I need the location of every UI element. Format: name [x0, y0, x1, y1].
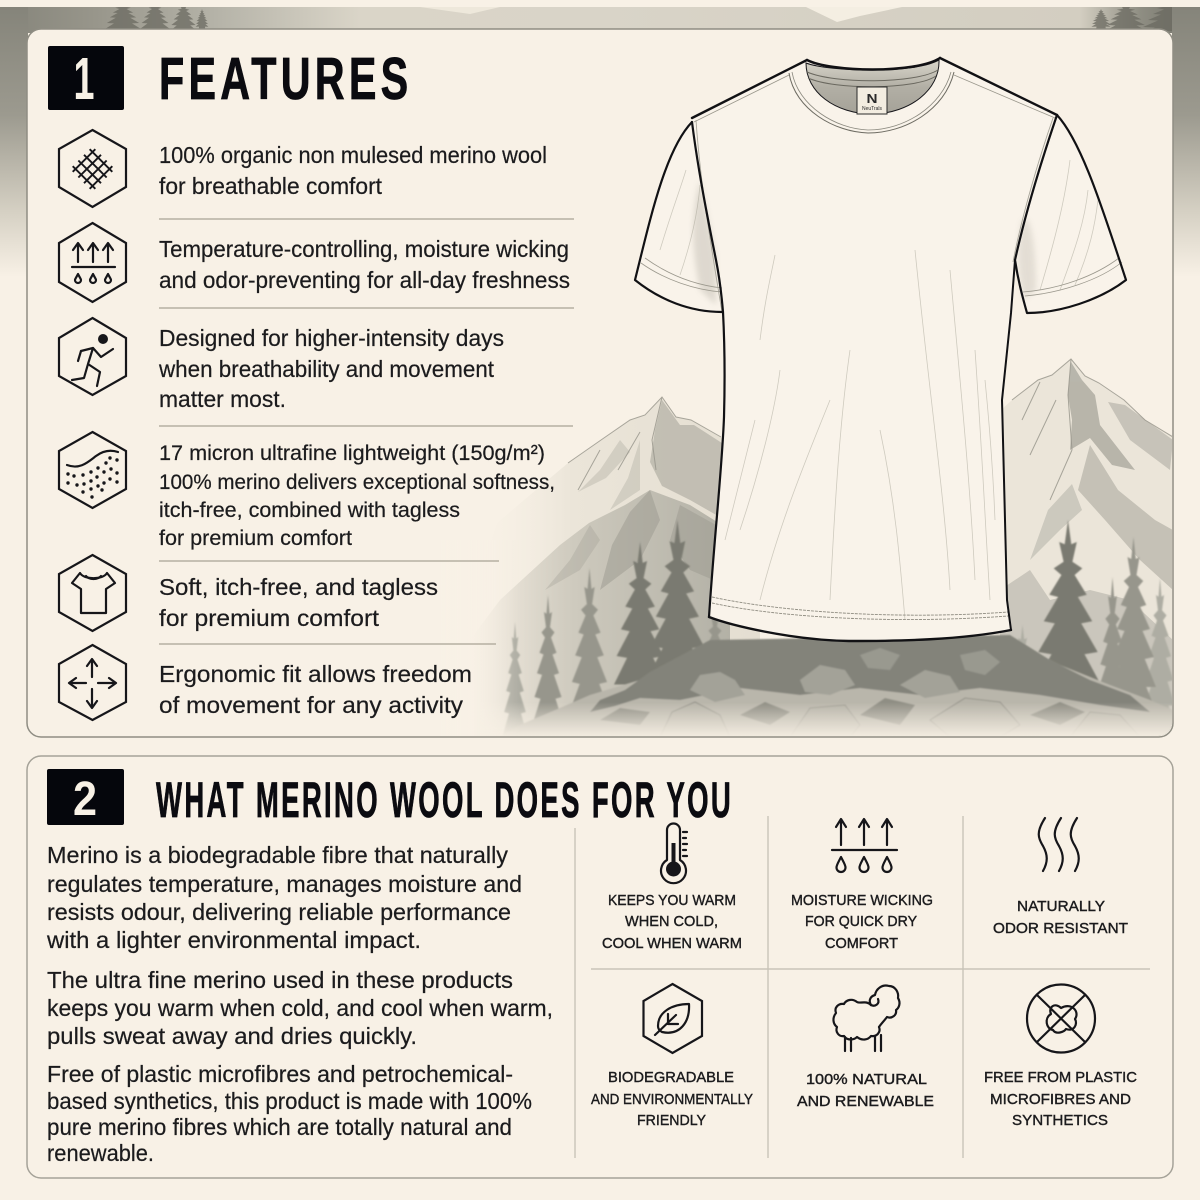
- icon: runner hexagon: [59, 318, 126, 395]
- text: merino description: keeps you warm when cold, and cool when warm,: [47, 995, 553, 1021]
- text: merino description: pulls sweat away and dries quickly.: [47, 1023, 417, 1049]
- label: natural and renewable: AND RENEWABLE: [797, 1093, 934, 1110]
- icon: odor waves: [1039, 818, 1079, 871]
- label: moisture wicking: FOR QUICK DRY: [805, 913, 917, 930]
- text: merino wool: [159, 142, 547, 199]
- text: merino description: resists odour, delivering reliable performance: [47, 899, 511, 925]
- text: high intensity: [158, 325, 504, 412]
- label: moisture wicking: [791, 892, 933, 952]
- text: ultrafine: for premium comfort: [159, 526, 352, 550]
- text: merino description: renewable.: [47, 1140, 154, 1166]
- label: moisture wicking: COMFORT: [825, 935, 898, 952]
- shirt: neck tag: NeuTrals: [862, 106, 882, 112]
- benefit: biodegradable: [591, 984, 753, 1129]
- text: high intensity: matter most.: [159, 386, 286, 412]
- text: temperature: and odor-preventing for all-day freshness: [159, 267, 570, 293]
- label: warm and cool: WHEN COLD,: [625, 913, 718, 930]
- icon: mesh hexagon: [59, 130, 126, 207]
- label: odor resistant: [993, 898, 1128, 937]
- section number badge: 1: 1: [74, 46, 94, 112]
- icon: sheep: [833, 986, 899, 1051]
- feature row: temperature: [59, 223, 570, 302]
- shading: fabric folds: [660, 160, 1098, 620]
- text: temperature: [159, 236, 570, 293]
- label: warm and cool: KEEPS YOU WARM: [608, 892, 736, 909]
- benefit: natural and renewable: [797, 986, 934, 1110]
- text: merino description: regulates temperature, manages moisture and: [47, 871, 522, 897]
- label: odor resistant: NATURALLY: [1017, 898, 1105, 915]
- section number badge: 1: [48, 46, 124, 112]
- label: odor resistant: ODOR RESISTANT: [993, 920, 1128, 937]
- icon: thermometer: [661, 824, 687, 883]
- label: free from plastic: [984, 1069, 1137, 1129]
- text: high intensity: when breathability and movement: [158, 356, 495, 382]
- text: temperature: Temperature-controlling, moisture wicking: [159, 236, 569, 262]
- icon: t-shirt hexagon: [59, 555, 126, 631]
- text: tagless: [159, 574, 438, 631]
- text: tagless: Soft, itch-free, and tagless: [159, 574, 438, 600]
- text: ergonomic fit: Ergonomic fit allows freedom: [159, 661, 472, 687]
- label: free from plastic: MICROFIBRES AND: [990, 1091, 1131, 1108]
- shirt: neck interior: [806, 60, 939, 114]
- illustration: t-shirt: [635, 58, 1126, 641]
- text: merino description: [46, 842, 553, 1166]
- benefit: free from plastic: [984, 984, 1137, 1129]
- icon: fabric texture hexagon: [59, 432, 126, 508]
- icon: leaf hexagon: [644, 984, 702, 1053]
- text: merino wool: for breathable comfort: [159, 173, 383, 199]
- text: ultrafine: [159, 441, 555, 550]
- text: merino description: The ultra fine merino used in these products: [47, 967, 513, 993]
- text: ultrafine: 17 micron ultrafine lightweight (150g/m²): [159, 441, 545, 465]
- label: natural and renewable: [797, 1071, 934, 1110]
- shirt: outer outline: [635, 58, 1126, 641]
- icon: crossed-out fibre: [1027, 984, 1095, 1052]
- section number badge: 2: [47, 769, 124, 826]
- text: tagless: for premium comfort: [159, 605, 380, 631]
- text: high intensity: Designed for higher-intensity days: [159, 325, 504, 351]
- label: moisture wicking: MOISTURE WICKING: [791, 892, 933, 909]
- benefit: warm and cool: [602, 824, 742, 952]
- feature row: ultrafine: [59, 432, 555, 550]
- text: ergonomic fit: [159, 661, 472, 718]
- benefit: odor resistant: [993, 818, 1128, 937]
- heading: features: FEATURES: [159, 46, 408, 112]
- text: ergonomic fit: of movement for any activity: [159, 692, 464, 718]
- text: merino description: pure merino fibres which are totally natural and: [47, 1114, 512, 1140]
- benefit: moisture wicking: [791, 819, 933, 952]
- illustration: mountains and pine forest: [495, 358, 1172, 736]
- label: warm and cool: COOL WHEN WARM: [602, 935, 742, 952]
- label: free from plastic: FREE FROM PLASTIC: [984, 1069, 1137, 1086]
- text: merino description: with a lighter environmental impact.: [46, 927, 421, 953]
- text: merino description: Free of plastic microfibres and petrochemical-: [47, 1061, 513, 1087]
- text: ultrafine: itch-free, combined with tagless: [159, 498, 460, 522]
- text: merino wool: 100% organic non mulesed merino wool: [159, 142, 547, 168]
- label: biodegradable: [591, 1069, 753, 1129]
- label: warm and cool: [602, 892, 742, 952]
- icon: moisture hexagon: [59, 223, 126, 302]
- text: ultrafine: 100% merino delivers exceptional softness,: [159, 470, 555, 494]
- panel: features: [27, 29, 1176, 772]
- feature row: high intensity: [59, 318, 504, 412]
- feature row: ergonomic fit: [59, 645, 472, 720]
- icon: four-way arrows hexagon: [59, 645, 126, 720]
- label: biodegradable: FRIENDLY: [637, 1112, 706, 1129]
- label: free from plastic: SYNTHETICS: [1012, 1112, 1108, 1129]
- text: merino description: based synthetics, this product is made with 100%: [47, 1088, 532, 1114]
- shirt: neck tag: [857, 87, 887, 114]
- feature row: merino wool: [59, 130, 547, 207]
- feature row: tagless: [59, 555, 438, 631]
- label: biodegradable: BIODEGRADABLE: [608, 1069, 734, 1086]
- section number badge: 2: 2: [73, 773, 97, 826]
- label: natural and renewable: 100% NATURAL: [806, 1071, 927, 1088]
- panel: what merino wool does for you: [27, 756, 1173, 1178]
- shirt: neck tag: N: [866, 91, 878, 106]
- text: merino description: Merino is a biodegradable fibre that naturally: [47, 842, 508, 868]
- background: top mountain strip and misty side edges: [0, 0, 1200, 277]
- icon: arrows and drops: [832, 819, 897, 872]
- label: biodegradable: AND ENVIRONMENTALLY: [591, 1091, 753, 1108]
- heading: what merino wool does for you: WHAT MERINO WOOL DOES FOR YOU: [156, 771, 731, 828]
